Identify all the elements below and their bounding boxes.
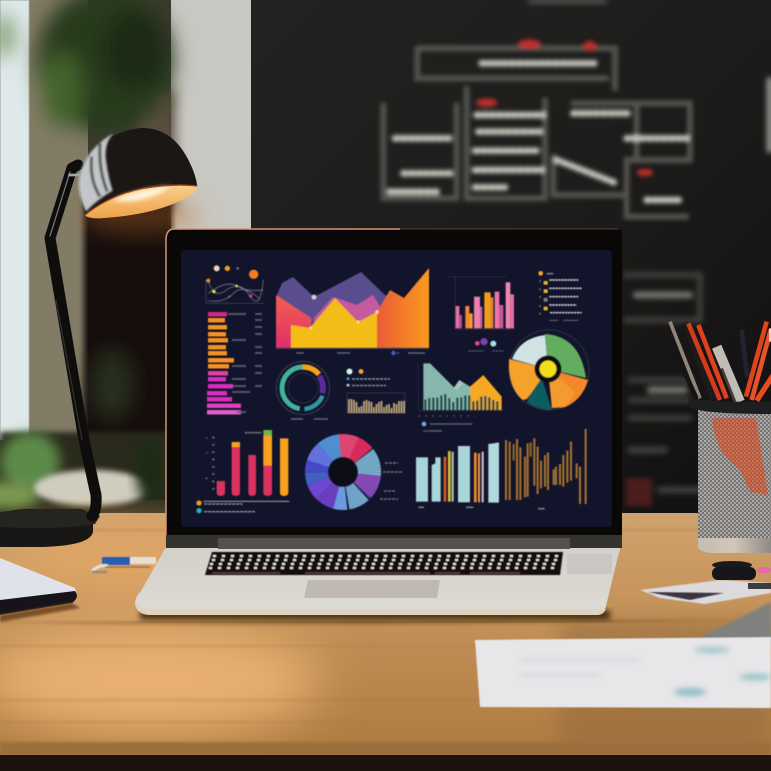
donut side labels	[380, 463, 402, 499]
legend dots and small line chart	[206, 265, 264, 303]
chalkboard	[251, 0, 771, 516]
plant behind lamp	[0, 0, 173, 421]
lamp shade	[68, 128, 197, 218]
pen and cable on desk, left	[92, 557, 156, 578]
grouped bar chart	[447, 276, 515, 329]
trackpad	[304, 580, 440, 598]
text legend, top right	[538, 271, 582, 320]
pencils and pens	[670, 322, 771, 402]
speaker grille	[567, 554, 612, 574]
front lip	[135, 600, 606, 615]
laptop base	[135, 547, 620, 615]
laptop shadow	[140, 610, 610, 620]
lamp base	[0, 509, 100, 547]
pie chart, right	[509, 330, 589, 410]
donut labels	[291, 418, 328, 420]
laptop	[135, 229, 622, 620]
pale and coloured vertical bars	[416, 422, 545, 509]
mesh cup	[698, 410, 771, 540]
thin brown bar chart	[506, 429, 586, 504]
red reflection in mesh	[712, 418, 768, 495]
printed report on desk, lower right	[475, 637, 771, 708]
screen	[181, 250, 612, 527]
horizontal bar chart	[207, 312, 262, 414]
area chart caption	[422, 422, 472, 431]
chalkboard diagrams and handwriting (blurred)	[383, 39, 690, 217]
stacked area chart	[276, 268, 429, 348]
lamp arm	[50, 165, 96, 516]
grey folder, lower right	[695, 602, 771, 646]
blurred potted plant and bowl, lower left	[0, 432, 170, 517]
hinge	[166, 535, 622, 548]
desk	[0, 513, 771, 771]
donut ring chart, centre	[276, 362, 330, 414]
clips and papers on desk, right	[640, 561, 771, 604]
teal and orange area chart	[418, 363, 502, 416]
pencil holder	[670, 322, 771, 553]
desk lamp	[0, 128, 200, 547]
chalkboard lower and right notes (blurred)	[530, 1, 770, 506]
cup rim	[689, 398, 771, 414]
small legend and mini bar chart, centre	[346, 368, 405, 413]
small legend under grouped bars	[468, 338, 503, 351]
keyboard	[205, 552, 563, 575]
area chart axis labels	[296, 351, 425, 355]
cup base band	[698, 538, 771, 553]
screen bezel	[166, 229, 622, 546]
dashboard on screen	[196, 265, 589, 513]
lamp shade glow	[80, 195, 200, 235]
notebook, lower left	[0, 558, 80, 622]
large segmented donut chart	[316, 446, 370, 498]
background wall and window	[0, 0, 771, 520]
vertical bar chart, bottom left	[196, 430, 289, 513]
